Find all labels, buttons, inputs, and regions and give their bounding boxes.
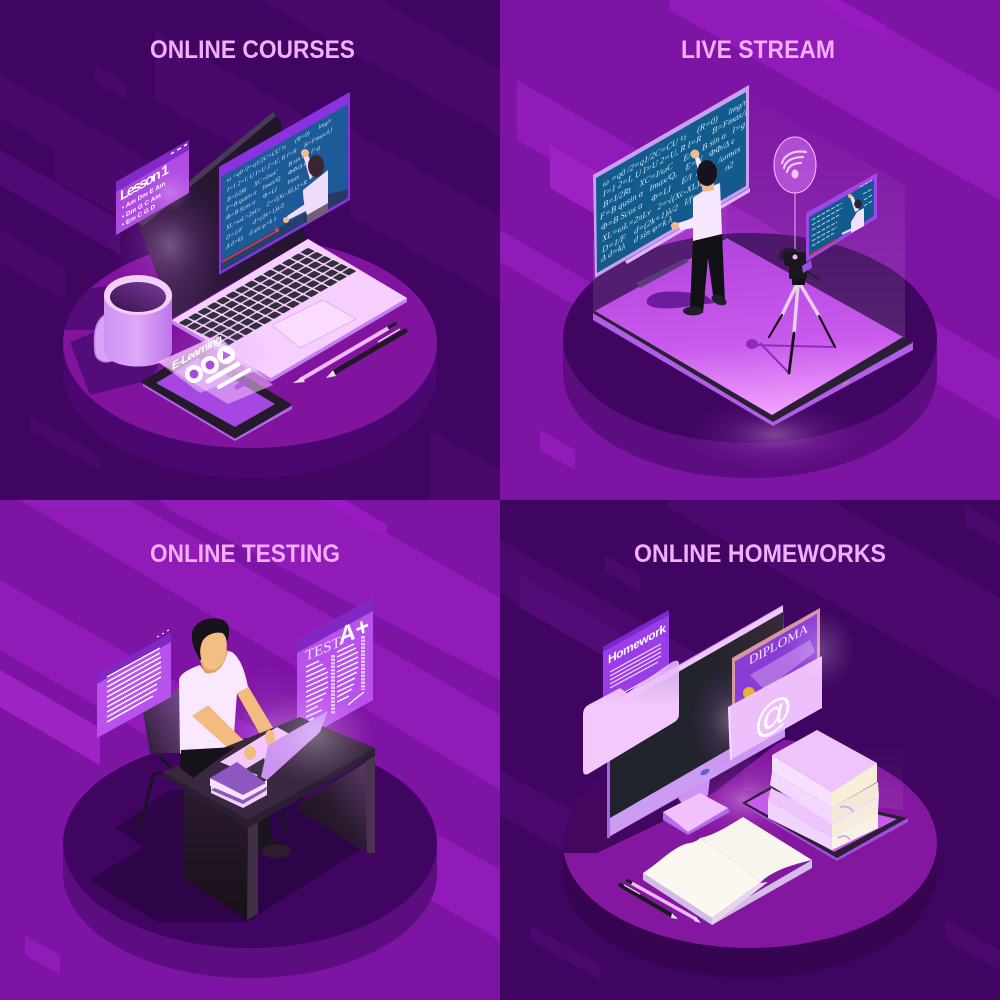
desk left leg xyxy=(184,790,248,920)
video window with teacher: XL=ωL=2πLv 2=√(Xc-XL)2+R xyxy=(225,178,307,232)
video window with teacher: Δ d=kλ d sin φ=k λ xyxy=(225,215,276,251)
heading: ONLINE HOMEWORKS xyxy=(634,540,886,568)
window: test a+: TEST xyxy=(305,633,341,665)
glow on monitor xyxy=(690,665,770,775)
progress bar xyxy=(221,188,348,271)
left arm xyxy=(192,705,255,760)
blackboard: XL=ωL=2πLv 2=√(Xc-XL)2+R n2 xyxy=(601,159,734,244)
disc platform xyxy=(563,233,937,478)
man at desk, lower body xyxy=(255,815,292,858)
tablet under books xyxy=(742,787,908,861)
blackboard: B=I/2Rt XC=I/ωC E/I B sin α I=g xyxy=(603,119,745,210)
glow at envelope top xyxy=(785,610,855,690)
panel: live stream xyxy=(500,0,1000,500)
shirt xyxy=(693,183,722,241)
shoes xyxy=(683,306,703,316)
window: text document xyxy=(97,630,171,738)
wifi bubble xyxy=(774,137,816,257)
hands and head xyxy=(690,150,700,158)
camera shadow xyxy=(754,343,833,372)
hair xyxy=(192,618,229,660)
video window with teacher: Φ=B Scos α Φ=LI Imax xyxy=(226,173,299,222)
disc platform xyxy=(63,238,437,478)
keyboard xyxy=(177,247,358,347)
blackboard xyxy=(593,85,752,278)
laptop base xyxy=(172,239,407,382)
pink pen xyxy=(293,323,397,383)
panel: online testing xyxy=(0,500,500,1000)
laptop glow xyxy=(257,687,373,783)
face xyxy=(200,633,227,670)
background: violet with strips xyxy=(500,0,1000,500)
panel: online courses xyxy=(0,0,500,500)
window: lesson 1: ▪ Em C G D xyxy=(122,203,155,229)
heading: LIVE STREAM xyxy=(681,36,835,64)
background: dark purple with strips xyxy=(0,0,500,500)
t-shirt xyxy=(179,651,248,754)
desk right leg xyxy=(300,763,367,852)
trackpad xyxy=(272,300,356,348)
panel: online homeworks xyxy=(500,500,1000,1000)
man upper body xyxy=(179,618,276,778)
glow behind panels xyxy=(110,180,230,310)
desk top xyxy=(163,717,375,820)
blackboard: Δ d=kλ d sin φ=k λ xyxy=(600,214,672,264)
camera xyxy=(789,262,807,279)
glass box around books xyxy=(743,745,903,810)
glass walls xyxy=(593,85,905,340)
folder xyxy=(583,661,679,774)
hologram: e-learning xyxy=(158,320,273,404)
blackboard: D=1/F d=(2k+1)λ/2 I/f= xyxy=(601,191,698,255)
pink pen xyxy=(626,880,701,923)
desk xyxy=(163,717,375,920)
homework document: Homework xyxy=(608,620,667,667)
window: lesson 1: ▪ Dm G C Am xyxy=(122,192,161,221)
window: test a+: A+ xyxy=(335,612,371,651)
envelope with @: @ xyxy=(754,683,793,747)
right arm xyxy=(235,686,276,746)
homework document xyxy=(603,610,669,705)
envelope with @ xyxy=(728,656,822,760)
neck xyxy=(200,650,228,677)
small stream window xyxy=(806,173,877,262)
video window with teacher: D=1/F d=(2k+1)λ/2 xyxy=(225,202,285,242)
disc platform xyxy=(63,738,437,978)
laptop screen xyxy=(138,112,306,318)
hologram: e-learning: E-Learning xyxy=(172,331,222,373)
background: dark purple with strips xyxy=(500,500,1000,1000)
black pen xyxy=(620,885,678,919)
man shadow xyxy=(647,292,715,308)
stand xyxy=(678,778,710,815)
open book xyxy=(643,817,812,925)
coffee mug xyxy=(94,275,172,366)
man at board xyxy=(671,150,728,316)
tablet platform xyxy=(593,237,913,426)
stack of books xyxy=(210,762,267,808)
heading: ONLINE COURSES xyxy=(150,36,355,64)
laptop xyxy=(138,112,407,382)
video window with teacher: ω =q0 /2=q1/2C=CU ½ (R=0) lmg/r xyxy=(227,117,332,184)
video window with teacher xyxy=(219,92,350,275)
camera on tripod xyxy=(746,245,835,373)
blackboard: ω =q0 /2=q1/2C=CU ½ (R=0) lmg/r xyxy=(603,97,747,189)
black pen xyxy=(326,329,405,378)
window: test a+ xyxy=(297,598,373,743)
body xyxy=(607,605,785,838)
trousers over desk xyxy=(180,747,235,778)
glow behind man xyxy=(198,665,338,805)
blackboard: F=B qusin α Imax/Q, E=U ΦΦ/Δ ε xyxy=(599,135,735,222)
stack of books xyxy=(768,730,879,850)
smartphone xyxy=(143,350,292,441)
window: lesson 1: Lesson 1 xyxy=(120,161,169,205)
diploma: DIPLOMA xyxy=(749,622,808,669)
diploma xyxy=(732,608,820,712)
video window with teacher: F=B qusin α Imax/Q ΦΦ/Δ ε xyxy=(225,160,306,213)
teacher xyxy=(283,149,347,224)
trousers xyxy=(180,747,235,778)
tripod legs xyxy=(769,284,835,373)
background: violet with strips xyxy=(0,500,500,1000)
desk shadow xyxy=(90,790,360,922)
monitor xyxy=(607,605,785,838)
trousers xyxy=(690,233,725,313)
disc platform xyxy=(555,720,937,978)
laptop on desk xyxy=(220,711,328,780)
chair xyxy=(140,687,288,837)
blackboard: Φ=B Scos α Φ=LI E/I ΔQ/α /ωmax xyxy=(601,143,741,233)
heading: ONLINE TESTING xyxy=(150,540,340,568)
video window with teacher: B=I/2Rt XC=I/ωC B sin α I=g xyxy=(227,143,321,204)
whiteboard tray xyxy=(636,258,688,288)
man's hands xyxy=(244,746,256,760)
blackboard: I=1 2=I, U I=U 2=U, R I=R B=Fmax/I,l xyxy=(602,104,752,199)
video window with teacher: I=1 2=I, U I=U 2=U, R I=R B=Fmax/I,l xyxy=(226,127,332,194)
window: lesson 1 xyxy=(116,140,192,235)
window: lesson 1: ▪ Am Dm E Am xyxy=(122,180,165,212)
